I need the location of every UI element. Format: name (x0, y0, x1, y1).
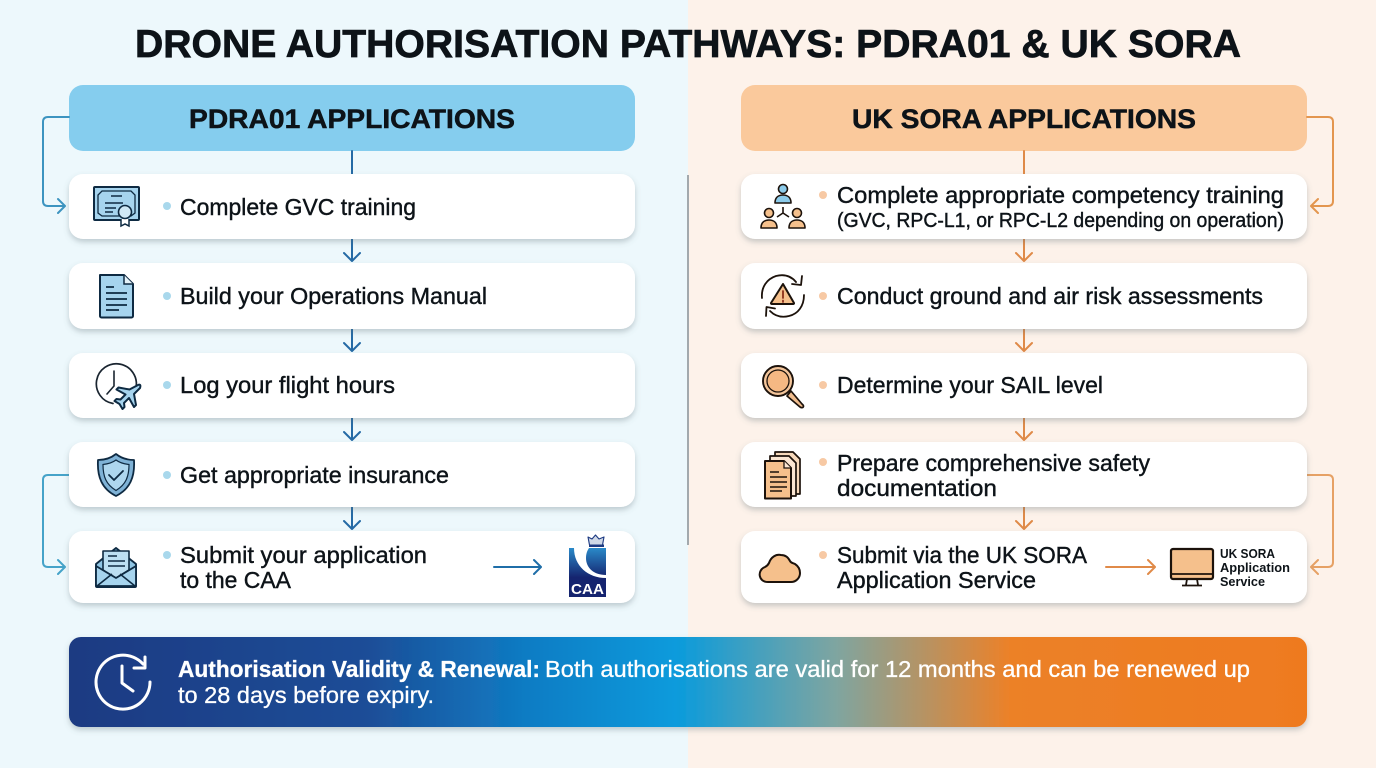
step text: Build your Operations Manual (180, 283, 487, 309)
connector arrows: PDRA01 steps (344, 151, 360, 529)
step text: documentation (837, 475, 997, 501)
bullet (819, 292, 827, 300)
step: safety documentation (741, 442, 1307, 507)
heading: PDRA01 applications: PDRA01 APPLICATIONS (189, 104, 515, 134)
heading: UK SORA applications (741, 85, 1307, 151)
step text (180, 542, 427, 593)
callout text: to 28 days before expiry. (178, 682, 434, 708)
icon: document stack (765, 452, 800, 498)
step text: Submit via the UK SORA (837, 542, 1088, 568)
bullet (819, 551, 827, 559)
bullet (163, 381, 171, 389)
step text: Complete GVC training (180, 194, 416, 220)
step text: Complete appropriate competency training (837, 182, 1284, 208)
step text: Get appropriate insurance (180, 462, 449, 488)
label: UK SORA Application Service: Application (1220, 561, 1290, 575)
arrow: to application service (1106, 560, 1155, 574)
icon: clock with arrow (96, 655, 150, 709)
callout: validity and renewal (69, 637, 1307, 727)
step text: Conduct ground and air risk assessments (837, 283, 1263, 309)
title: DRONE AUTHORISATION PATHWAYS: PDRA01 & UK SORA (135, 23, 1241, 66)
icon: magnifying glass (763, 366, 803, 408)
bullet (163, 292, 171, 300)
icon: shield (98, 454, 134, 496)
bullet (163, 551, 171, 559)
bullet (819, 191, 827, 199)
bullet (163, 471, 171, 479)
callout text (178, 656, 1250, 708)
step text: Log your flight hours (180, 372, 395, 398)
step text: Prepare comprehensive safety (837, 450, 1151, 476)
step: competency training (741, 174, 1307, 239)
bullet (819, 381, 827, 389)
icon: people hierarchy (761, 184, 805, 228)
bullet (163, 202, 171, 210)
side arrow: insurance to submit (43, 475, 69, 574)
step: Get appropriate insurance (69, 442, 635, 507)
callout text: Both authorisations are valid for 12 months and can be renewed up (545, 656, 1250, 682)
icon: monitor (1171, 549, 1213, 586)
side arrow: documentation to submit (1307, 475, 1333, 574)
step text: (GVC, RPC-L1, or RPC-L2 depending on operation) (837, 210, 1284, 232)
heading: PDRA01 applications (69, 85, 635, 151)
step text (837, 450, 1151, 501)
label: UK SORA Application Service: Service (1220, 575, 1265, 589)
step: SAIL level (741, 353, 1307, 418)
icon: CAA logo: CAA (571, 581, 604, 598)
icon: cloud (760, 555, 800, 582)
step: submit via UK SORA (741, 531, 1307, 603)
step: Complete GVC training (69, 174, 635, 239)
label: UK SORA Application Service: UK SORA (1220, 547, 1275, 561)
icon: certificate (94, 187, 139, 226)
label: UK SORA Application Service (1220, 547, 1290, 589)
step: risk assessments (741, 263, 1307, 329)
icon: CAA logo (569, 535, 606, 598)
bullet (819, 458, 827, 466)
step: Submit your application (69, 531, 635, 603)
callout text: Authorisation Validity & Renewal: (178, 656, 540, 682)
step: Log your flight hours (69, 353, 635, 418)
step text: Application Service (837, 567, 1036, 593)
icon: warning with cycle (762, 275, 804, 317)
heading: UK SORA applications: UK SORA APPLICATIONS (852, 104, 1196, 134)
step text: Determine your SAIL level (837, 372, 1103, 398)
panel: PDRA01 applications (43, 85, 635, 603)
step text: Submit your application (180, 542, 427, 568)
divider (687, 175, 689, 545)
step text (837, 542, 1088, 593)
icon: document (100, 275, 133, 318)
step text: to the CAA (180, 567, 292, 593)
side arrow: to competency training (1307, 117, 1333, 213)
side arrow: to GVC training (43, 117, 69, 213)
icon: envelope (96, 548, 136, 587)
step text (837, 182, 1284, 232)
icon: clock and plane (96, 364, 140, 409)
arrow: to CAA (494, 560, 541, 574)
connector arrows: UK SORA steps (1016, 151, 1032, 529)
step: Build your Operations Manual (69, 263, 635, 329)
panel: UK SORA applications (741, 85, 1333, 603)
